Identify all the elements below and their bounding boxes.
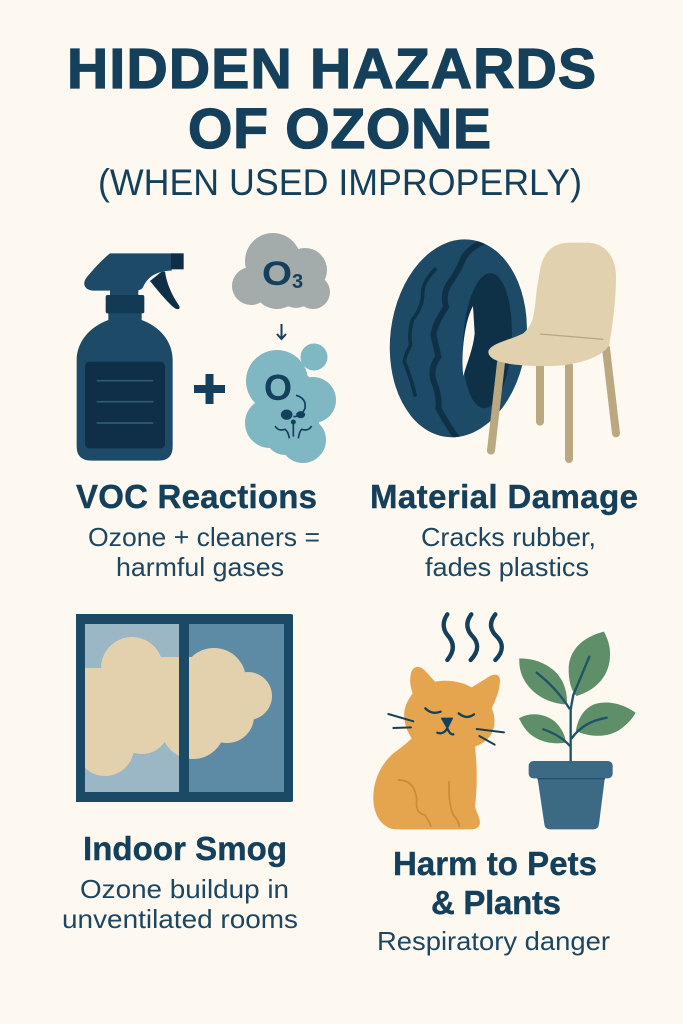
icon: fumes	[444, 614, 502, 660]
icon: reaction cloud: O	[264, 367, 292, 408]
text: smog description: unventilated rooms	[62, 904, 298, 934]
heading: VOC Reactions: VOC Reactions	[76, 478, 317, 515]
icon: cracked tire	[390, 239, 527, 438]
icon: ozone cloud: O	[262, 255, 292, 293]
icon: ozone cloud	[232, 233, 330, 309]
text: smog description: Ozone buildup in	[80, 874, 289, 904]
subtitle: (WHEN USED IMPROPERLY)	[98, 162, 582, 203]
heading: Harm to Pets & Plants: & Plants	[431, 884, 561, 921]
title	[67, 37, 596, 161]
text: material description	[421, 522, 596, 582]
icon: window with smog	[76, 614, 293, 802]
panel: indoor smog	[76, 614, 293, 802]
text: VOC description: Ozone + cleaners =	[88, 522, 320, 552]
title: OF OZONE	[188, 97, 491, 161]
panel: material damage	[379, 231, 616, 459]
text: material description: fades plastics	[425, 552, 589, 582]
heading: Harm to Pets & Plants: Harm to Pets	[393, 845, 597, 882]
icon: cat	[373, 667, 504, 829]
text: VOC description	[88, 522, 320, 582]
text: material description: Cracks rubber,	[421, 522, 596, 552]
text: VOC description: harmful gases	[116, 552, 284, 582]
icon: plus sign	[194, 374, 225, 404]
icon: reaction cloud	[245, 344, 336, 463]
text: smog description	[62, 874, 298, 934]
text: pets description: Respiratory danger	[377, 926, 610, 956]
heading: Harm to Pets & Plants	[393, 845, 597, 921]
icon: chair	[488, 243, 616, 459]
title: HIDDEN HAZARDS	[67, 37, 596, 101]
panel: pets and plants	[373, 614, 636, 829]
icon: spray bottle	[77, 253, 184, 461]
panel: VOC reactions	[77, 233, 336, 463]
icon: potted plant	[519, 632, 636, 829]
heading: Indoor Smog: Indoor Smog	[83, 830, 287, 867]
heading: Material Damage: Material Damage	[370, 478, 638, 515]
icon: down arrow	[277, 324, 286, 339]
icon: ozone cloud: 3	[292, 271, 303, 293]
